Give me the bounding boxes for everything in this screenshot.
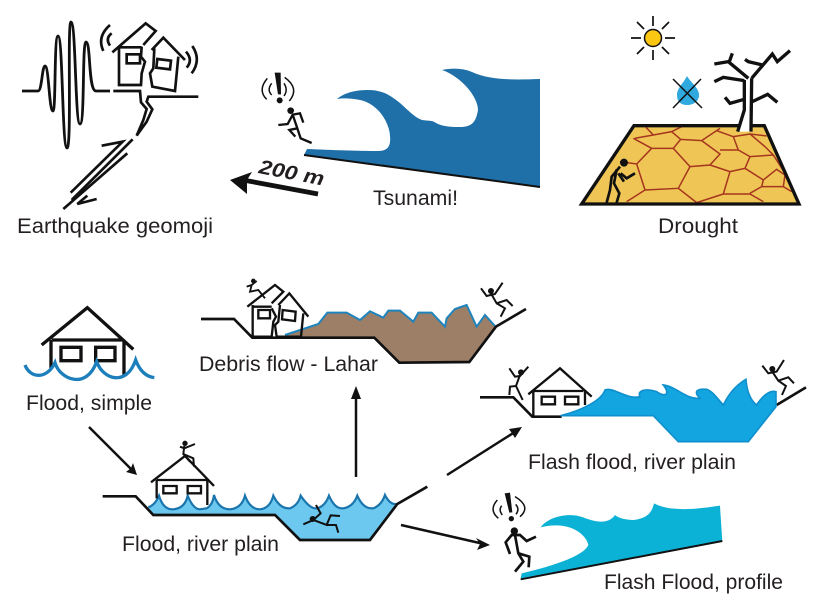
icon: person on roof [180,441,195,467]
panel: flash flood river plain [480,360,806,474]
channel profile [201,309,526,363]
distance arrow [230,172,318,194]
label: earthquake geomoji: Earthquake geomoji [17,215,213,238]
label: flood river plain: Flood, river plain [122,533,279,556]
panel: earthquake geomoji [17,22,213,238]
arrow: river plain to debris flow [351,386,361,477]
label: tsunami: Tsunami! [373,187,458,210]
shoreline [304,155,540,187]
icon: fleeing person [762,360,794,395]
icon: house [528,368,592,416]
arrow: flood simple to river plain [89,427,137,475]
icon: warning and running person [262,73,312,143]
panel: tsunami [230,69,540,210]
seismogram [22,22,110,148]
label: drought: Drought [658,215,738,238]
panel: flood river plain [103,441,427,556]
arrow: river plain to flash flood profile [401,525,490,550]
cracked ground [582,126,799,204]
icon: person on bank [509,367,528,400]
channel profile [103,487,427,540]
icon: sun [631,16,675,60]
panel: drought [582,16,799,238]
icon: person on roof [247,279,265,298]
panel: flash flood profile [493,493,783,594]
water waves [25,360,154,379]
tsunami wave [304,69,540,187]
debris fill [285,305,495,362]
arrow: river plain to flash flood [447,427,522,475]
flash flood water [561,379,776,442]
icon: crossed water drop [673,76,702,108]
label: flood simple: Flood, simple [26,392,152,415]
icon: cracked houses and ground [101,23,198,136]
channel profile [480,387,806,417]
icon: dead tree [714,51,790,132]
debris surface line [285,305,495,335]
label: flash flood profile: Flash Flood, profile [604,571,783,594]
flood water [148,495,397,540]
label: 200 m: 200 m [256,156,326,191]
flash flood wave [521,503,722,578]
label: debris flow: Debris flow - Lahar [199,353,378,376]
slope line [521,541,722,579]
icon: house [42,308,133,377]
icon: strike-slip fault arrows [63,139,133,209]
icon: fleeing person [481,283,513,317]
panel: debris flow - lahar [199,279,526,376]
icon: warning and person [493,493,536,572]
icon: house [151,456,214,505]
label: flash flood river plain: Flash flood, river plain [528,451,736,474]
icon: collapsed houses [247,285,308,337]
icon: swimmer [303,505,340,533]
icon: person on cracked ground [607,159,635,203]
panel: flood simple [25,308,154,415]
wave line [148,495,397,509]
